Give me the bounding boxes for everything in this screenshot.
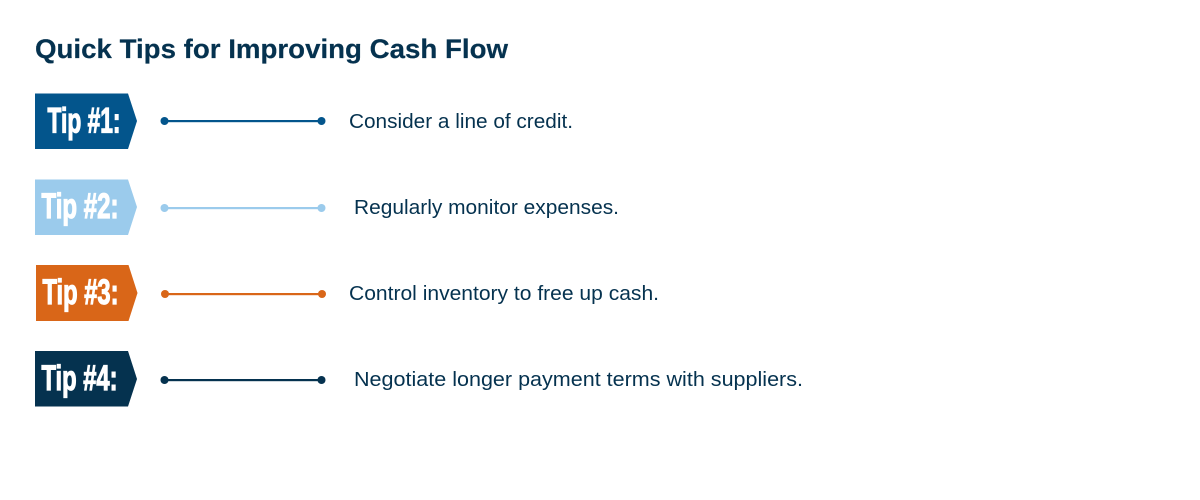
tip 4 badge: Tip #4:	[42, 359, 118, 398]
tip 2 text: Regularly monitor expenses.	[354, 197, 619, 219]
tip 1 text: Consider a line of credit.	[349, 111, 573, 133]
tip 2 connector	[160, 204, 326, 212]
tip 3 text: Control inventory to free up cash.	[349, 283, 659, 305]
tip 3 badge: Tip #3:	[42, 273, 118, 312]
tip 3 row	[36, 265, 659, 321]
tip 3 badge	[36, 265, 138, 321]
tip 1 row	[35, 94, 573, 149]
tip 2 badge	[35, 180, 137, 235]
tip 3 connector	[161, 290, 326, 298]
tip 4 connector	[160, 376, 326, 384]
tip 2 row	[35, 180, 619, 235]
tip 1 connector	[160, 117, 326, 125]
tip 1 badge	[35, 94, 137, 149]
tip 1 badge: Tip #1:	[48, 102, 120, 140]
title: Quick Tips for Improving Cash Flow	[35, 34, 509, 64]
tip 4 badge	[35, 351, 137, 406]
tip 4 text: Negotiate longer payment terms with suppliers.	[354, 369, 803, 391]
tip 2 badge: Tip #2:	[42, 187, 118, 226]
tip 4 row	[35, 351, 803, 406]
